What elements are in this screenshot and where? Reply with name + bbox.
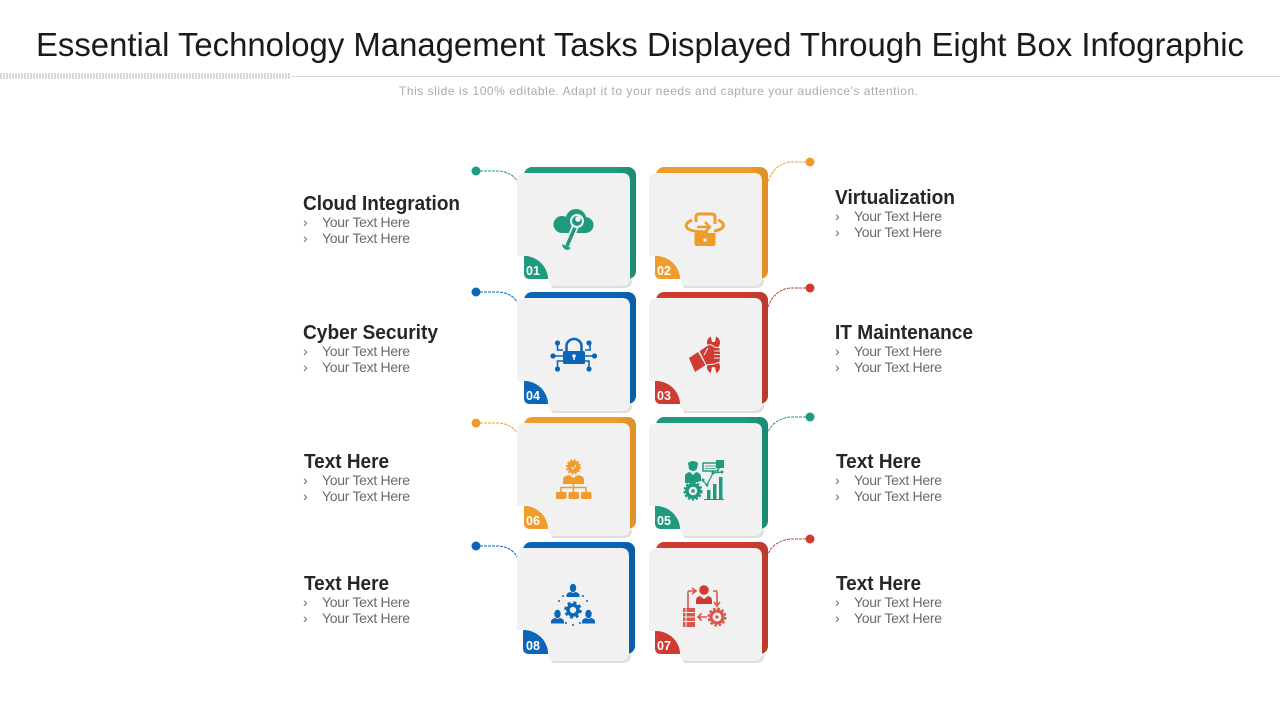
label: Text Here (left, row 3): Text Here	[304, 451, 389, 473]
number badge 05: 05	[657, 514, 671, 528]
label: Text Here (left, row 3): ›	[303, 488, 308, 504]
label: Virtualization: Virtualization	[835, 187, 955, 209]
label: Text Here (left, row 4)	[303, 573, 410, 626]
label: Text Here (left, row 3)	[303, 451, 410, 504]
label: Text Here (right, row 3)	[835, 451, 942, 504]
label: Cyber Security: Your Text Here	[322, 359, 410, 375]
label: Text Here (left, row 4): ›	[303, 594, 308, 610]
number badge 06	[524, 506, 548, 529]
subtitle: This slide is 100% editable. Adapt it to your needs and capture your audience's attention.	[399, 84, 918, 98]
label: Cloud Integration: ›	[303, 214, 308, 230]
label: Text Here (right, row 4)	[835, 573, 942, 626]
number badge 06: 06	[526, 514, 540, 528]
label: Text Here (left, row 4): ›	[303, 610, 308, 626]
label: Cyber Security	[303, 322, 439, 375]
icon: process cycle	[683, 585, 726, 627]
label: Virtualization: Your Text Here	[854, 208, 942, 224]
icon: phone rotation	[686, 214, 723, 246]
panel: 02 Virtualization	[649, 158, 955, 288]
number badge 02	[655, 256, 680, 279]
number badge 01: 01	[526, 264, 540, 278]
label: Cloud Integration: Cloud Integration	[303, 193, 460, 215]
label: Text Here (right, row 3): ›	[835, 472, 840, 488]
label: IT Maintenance: ›	[835, 343, 840, 359]
icon: team around gear	[551, 584, 595, 626]
number badge 01	[524, 256, 548, 279]
label: IT Maintenance: Your Text Here	[854, 343, 942, 359]
label: Cloud Integration: ›	[303, 230, 308, 246]
number badge 08: 08	[526, 639, 540, 653]
number badge 05	[655, 506, 680, 529]
number badge 04	[524, 381, 548, 404]
number badge 07: 07	[657, 639, 671, 653]
label: Text Here (left, row 3): ›	[303, 472, 308, 488]
label: Text Here (right, row 3): Text Here	[836, 451, 921, 473]
label: Text Here (right, row 4): Your Text Here	[854, 610, 942, 626]
label: IT Maintenance: Your Text Here	[854, 359, 942, 375]
label: Text Here (right, row 4): ›	[835, 594, 840, 610]
label: Text Here (right, row 3): Your Text Here	[854, 488, 942, 504]
label: Text Here (right, row 4): Text Here	[836, 573, 921, 595]
label: Text Here (left, row 3): Your Text Here	[322, 488, 410, 504]
icon: circuit lock	[550, 339, 597, 372]
panel: 05 Text Here	[649, 412, 942, 538]
label: Text Here (left, row 4): Text Here	[304, 573, 389, 595]
label: Cyber Security: Cyber Security	[303, 322, 439, 344]
icon: hand with wrench	[689, 335, 720, 374]
label: Virtualization	[835, 187, 955, 240]
label: IT Maintenance	[835, 322, 973, 375]
number badge 02: 02	[657, 264, 671, 278]
label: Text Here (left, row 4): Your Text Here	[322, 594, 410, 610]
label: Text Here (right, row 3): Your Text Here	[854, 472, 942, 488]
label: Cyber Security: Your Text Here	[322, 343, 410, 359]
label: Cyber Security: ›	[303, 359, 308, 375]
label: Cyber Security: ›	[303, 343, 308, 359]
panel: 08 Text Here	[303, 542, 635, 663]
label: Text Here (left, row 4): Your Text Here	[322, 610, 410, 626]
panel: 07 Text Here	[649, 534, 942, 663]
icon: engineer with gear and growth chart	[684, 460, 724, 500]
label: Virtualization: ›	[835, 224, 840, 240]
panel: 03 IT Maintenance	[649, 284, 973, 413]
label: Text Here (right, row 4): Your Text Here	[854, 594, 942, 610]
panel: 06 Text Here	[303, 417, 636, 538]
panel: 04 Cyber Security	[303, 288, 636, 413]
icon: cloud with wrench	[554, 209, 594, 250]
label: Cloud Integration: Your Text Here	[322, 230, 410, 246]
number badge 08	[523, 630, 548, 654]
title: Essential Technology Management Tasks Displayed Through Eight Box Infographic	[36, 26, 1244, 63]
label: Cloud Integration	[303, 193, 460, 246]
number badge 07	[655, 631, 680, 654]
label: Text Here (right, row 3): ›	[835, 488, 840, 504]
icon: manager hierarchy	[556, 460, 592, 499]
label: Text Here (right, row 4): ›	[835, 610, 840, 626]
label: IT Maintenance: IT Maintenance	[835, 322, 973, 344]
number badge 03: 03	[657, 389, 671, 403]
number badge 03	[655, 381, 680, 404]
number badge 04: 04	[526, 389, 540, 403]
label: Cloud Integration: Your Text Here	[322, 214, 410, 230]
label: Virtualization: ›	[835, 208, 840, 224]
panel: 01 Cloud Integration	[303, 166, 636, 288]
label: Text Here (left, row 3): Your Text Here	[322, 472, 410, 488]
label: IT Maintenance: ›	[835, 359, 840, 375]
label: Virtualization: Your Text Here	[854, 224, 942, 240]
